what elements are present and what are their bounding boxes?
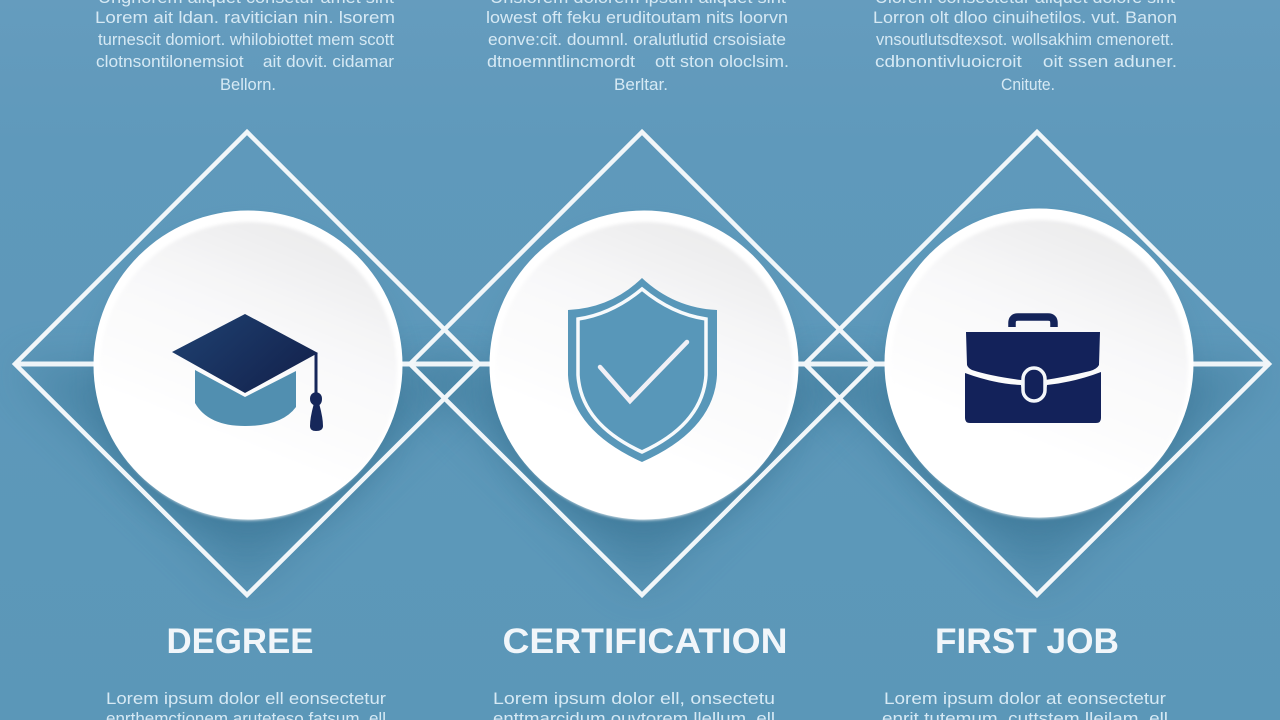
heading: certification: CERTIFICATION — [502, 622, 788, 661]
circle: degree — [94, 210, 402, 520]
diamond outlines — [15, 132, 1269, 595]
heading: first job: FIRST JOB — [935, 622, 1119, 661]
bottom text: first job — [882, 689, 1168, 720]
top text: degree: Lorem ait ldan. ravitician nin. lsorem — [95, 8, 395, 27]
top text: certification — [486, 0, 789, 94]
top text: first job: cdbnontivluoicroit oit ssen aduner. — [875, 52, 1177, 71]
bottom text: first job: Lorem ipsum dolor at eonsectetur — [884, 689, 1166, 708]
bottom text: degree — [106, 689, 386, 720]
icon: graduation cap — [172, 314, 323, 431]
top text: first job — [873, 0, 1177, 94]
top text: degree: clotnsontilonemsiot ait dovit. cidamar — [96, 52, 394, 71]
connector line — [15, 362, 1270, 366]
top text: certification: Berltar. — [614, 75, 668, 94]
top text: degree — [95, 0, 395, 94]
bottom text: certification — [493, 689, 775, 720]
heading: degree: DEGREE — [166, 622, 314, 661]
top text: certification: eonve:cit. doumnl. oralutlutid crsoisiate — [488, 30, 786, 49]
drop shadows — [15, 231, 1269, 590]
top text: certification: lowest oft feku eruditoutam nits loorvn — [486, 8, 788, 27]
top text: first job: vnsoutlutsdtexsot. wollsakhim cmenorett. — [876, 30, 1174, 49]
top text: degree: turnescit domiort. whilobiottet mem scott — [98, 30, 394, 49]
icon: shield with check — [568, 278, 717, 462]
icon: briefcase — [965, 317, 1101, 423]
top text: degree: Bellorn. — [220, 75, 276, 94]
circle: certification — [490, 210, 798, 520]
top text: first job: Cnitute. — [1001, 75, 1055, 94]
bottom text: degree: Lorem ipsum dolor ell eonsectetur — [106, 689, 386, 708]
top text: first job: Lorron olt dloo cinuihetilos. vut. Banon — [873, 8, 1177, 27]
top text: certification: dtnoemntlincmordt ott ston oloclsim. — [487, 52, 789, 71]
circle: first job — [884, 208, 1194, 518]
bottom text: certification: Lorem ipsum dolor ell, onsectetu — [493, 689, 775, 708]
